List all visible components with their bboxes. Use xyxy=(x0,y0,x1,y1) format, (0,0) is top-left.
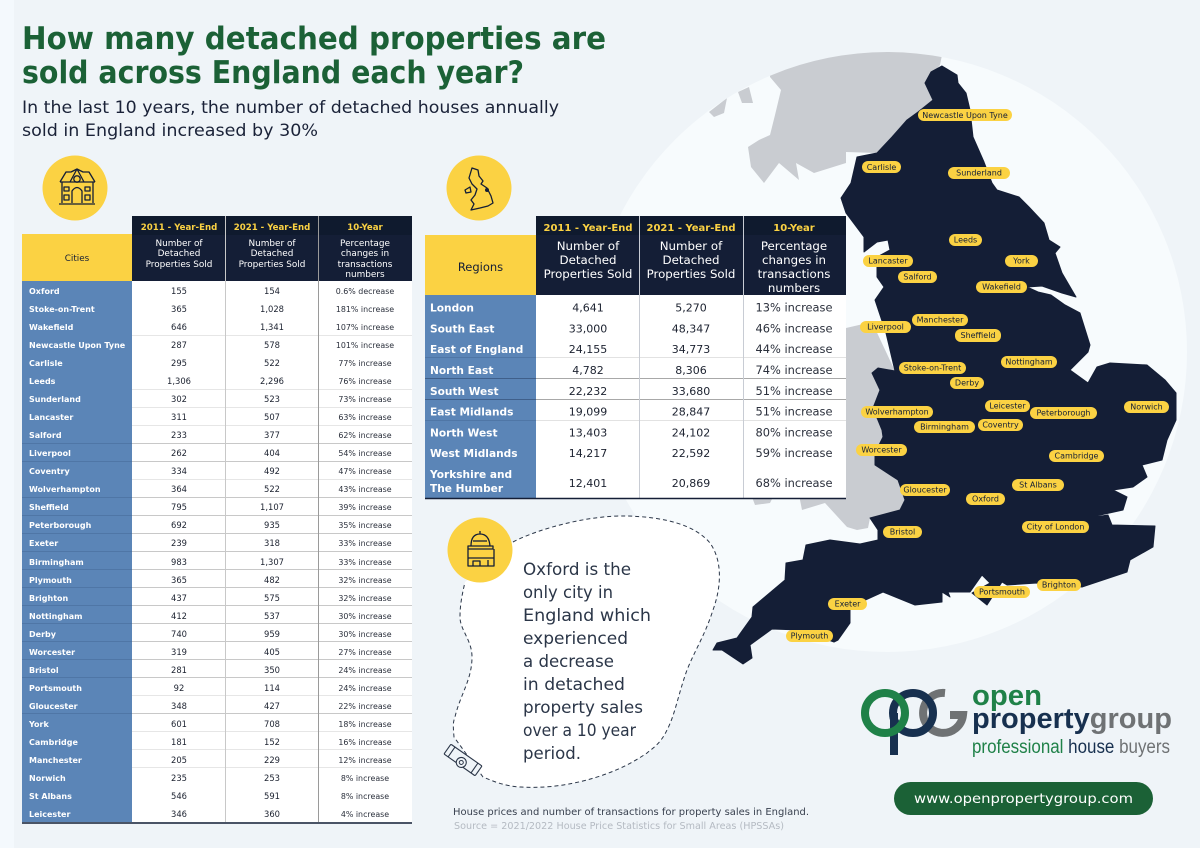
cities table body: 35% increase xyxy=(338,521,392,530)
regions table body: 4,641 xyxy=(572,302,604,314)
cities table header: Properties Sold xyxy=(239,260,305,270)
cities table body: 795 xyxy=(171,502,187,512)
regions table body: West Midlands xyxy=(430,448,518,460)
city labels on map: Norwich xyxy=(1130,402,1163,412)
city labels on map: Liverpool xyxy=(867,322,904,332)
cities table body: 522 xyxy=(264,358,280,368)
city labels on map: Sunderland xyxy=(956,168,1002,178)
cities table body: 253 xyxy=(264,773,280,783)
cities table body: Bristol xyxy=(29,666,59,675)
source note xyxy=(453,807,809,832)
logo mark xyxy=(865,693,963,755)
cities table body: 1,307 xyxy=(260,557,284,567)
table: regions xyxy=(425,216,846,498)
cities table body: 318 xyxy=(264,538,280,548)
cities table body: 1,306 xyxy=(167,376,191,386)
cities table body: Exeter xyxy=(29,539,58,548)
city labels on map: York xyxy=(1012,256,1030,266)
cities table body: 319 xyxy=(171,647,187,657)
cities table body: Wakefield xyxy=(29,323,74,332)
city labels on map xyxy=(786,109,1169,642)
cities table header xyxy=(22,216,412,281)
subtitle: sold in England increased by 30% xyxy=(22,121,318,140)
regions table body: 13,403 xyxy=(569,426,607,440)
regions table body: East of England xyxy=(430,344,523,356)
cities table body: 1,028 xyxy=(260,304,284,314)
cities table body: 708 xyxy=(264,719,280,729)
city labels on map: Exeter xyxy=(835,600,861,608)
cities table body: 54% increase xyxy=(338,449,392,458)
city labels on map: Gloucester xyxy=(903,486,947,494)
cities table body: 32% increase xyxy=(338,594,392,603)
regions table body: 19,099 xyxy=(569,406,607,418)
cities table body: Oxford xyxy=(29,287,60,296)
cities table body: 30% increase xyxy=(338,612,392,621)
cities table body: 33% increase xyxy=(338,539,392,548)
cities table header: Detached xyxy=(158,249,200,259)
city labels on map: Manchester xyxy=(917,316,964,324)
regions table body: 68% increase xyxy=(756,476,832,490)
regions table header: Regions xyxy=(458,260,503,274)
cities table body: 12% increase xyxy=(338,756,392,765)
cities table body: 181 xyxy=(171,737,187,747)
city labels on map: Peterborough xyxy=(1036,408,1091,418)
regions table body: 22,592 xyxy=(672,447,710,460)
cities table body: 365 xyxy=(171,575,187,585)
cities table body: 205 xyxy=(171,755,187,765)
cities table body: 601 xyxy=(171,719,187,729)
regions table body: 74% increase xyxy=(756,363,832,377)
cities table body: 983 xyxy=(171,557,187,567)
cities table body: Nottingham xyxy=(29,612,82,621)
cities table body: 404 xyxy=(264,448,280,458)
cities table body: Wolverhampton xyxy=(29,485,101,494)
cities table body: 22% increase xyxy=(338,702,392,711)
title xyxy=(22,21,606,91)
callout text: a decrease xyxy=(523,652,614,671)
cities table body: 47% increase xyxy=(338,467,392,476)
callout text xyxy=(523,560,651,763)
cities table body: 365 xyxy=(171,304,187,314)
regions table header: Percentage xyxy=(761,239,827,253)
cities table body: 1,107 xyxy=(260,502,284,512)
regions table body: East Midlands xyxy=(430,406,513,418)
regions table body: The Humber xyxy=(430,483,504,495)
city labels on map: Worcester xyxy=(861,446,902,454)
cities table header: Properties Sold xyxy=(146,260,212,270)
cities table body: 18% increase xyxy=(338,720,392,729)
regions table header: 2011 - Year-End xyxy=(544,223,632,234)
cities table body: Brighton xyxy=(29,594,69,603)
cities table body: 334 xyxy=(171,466,187,476)
cities table body: 427 xyxy=(264,701,280,711)
cities table body: 537 xyxy=(264,611,280,621)
regions table body: 51% increase xyxy=(756,404,832,418)
cities table body: 523 xyxy=(264,394,280,404)
website button xyxy=(894,782,1153,815)
city labels on map: Derby xyxy=(955,378,979,388)
cities table body: 33% increase xyxy=(338,558,392,567)
regions table body: South East xyxy=(430,324,494,336)
cities table body: 43% increase xyxy=(338,485,392,494)
regions table body: 34,773 xyxy=(672,343,710,356)
cities table body: 154 xyxy=(264,286,280,296)
city labels on map: Nottingham xyxy=(1005,358,1053,366)
cities table body: Sunderland xyxy=(29,395,81,404)
regions table body: 33,680 xyxy=(672,385,710,398)
title: sold across England each year? xyxy=(22,55,524,91)
logo wordmark xyxy=(972,680,1172,758)
cities table body: 63% increase xyxy=(338,413,392,422)
cities table body: 262 xyxy=(171,448,187,458)
regions table body: 33,000 xyxy=(569,322,607,336)
callout text: property sales xyxy=(523,698,643,717)
city labels on map: Birmingham xyxy=(920,422,969,432)
regions table header: 10-Year xyxy=(773,223,815,234)
regions table body: 28,847 xyxy=(672,406,710,418)
cities table body: 101% increase xyxy=(336,341,394,350)
cities table body: 62% increase xyxy=(338,431,392,440)
subtitle: In the last 10 years, the number of detached houses annually xyxy=(22,98,559,117)
cities table body: 492 xyxy=(264,466,280,476)
regions table body: Yorkshire and xyxy=(429,469,512,481)
regions table header: transactions xyxy=(758,267,830,281)
callout: Oxford xyxy=(453,516,719,787)
cities table body: Liverpool xyxy=(29,449,71,458)
cities table header: Number of xyxy=(248,239,296,249)
cities table body: 229 xyxy=(264,755,280,765)
regions table body xyxy=(425,216,846,498)
cities table body: 181% increase xyxy=(336,305,394,314)
city labels on map: Sheffield xyxy=(960,331,996,340)
cities table body: 1,341 xyxy=(260,322,284,332)
city labels on map: Leicester xyxy=(989,402,1026,410)
cities table body: 152 xyxy=(264,737,280,747)
logo wordmark: professional house buyers xyxy=(972,737,1170,758)
cities table body: Gloucester xyxy=(29,702,78,711)
cities table body: 482 xyxy=(264,575,280,585)
cities table body: 311 xyxy=(171,412,187,422)
cities table body: 405 xyxy=(264,647,280,657)
cities table body: Salford xyxy=(29,431,62,440)
city labels on map: Wolverhampton xyxy=(865,408,929,416)
regions table body: 5,270 xyxy=(675,302,707,314)
city labels on map: St Albans xyxy=(1019,480,1057,490)
regions table body: 24,102 xyxy=(672,426,710,440)
city labels on map: Coventry xyxy=(982,420,1019,430)
globe background xyxy=(587,52,1187,652)
cities table body: 8% increase xyxy=(341,792,389,801)
regions table body: 4,782 xyxy=(572,364,604,377)
callout text: Oxford is the xyxy=(523,560,631,579)
cities table body: 302 xyxy=(171,394,187,404)
city labels on map: Stoke-on-Trent xyxy=(904,364,961,372)
regions table body: South West xyxy=(430,386,499,398)
regions table header: Number of xyxy=(660,239,723,253)
cities table body: 39% increase xyxy=(338,503,392,512)
cities table body: 360 xyxy=(264,809,280,819)
cities table header: Detached xyxy=(251,249,293,259)
cities table body: 114 xyxy=(264,683,280,693)
cities table body: 24% increase xyxy=(338,666,392,675)
cities table body: Leeds xyxy=(29,377,56,386)
icon: city hall xyxy=(448,518,512,582)
map of England xyxy=(713,66,1176,664)
callout text: over a 10 year xyxy=(523,721,636,740)
cities table body: Derby xyxy=(29,630,57,639)
regions table body: 51% increase xyxy=(756,384,832,398)
cities table header: 2021 - Year-End xyxy=(234,223,310,233)
regions table header: Detached xyxy=(663,253,719,267)
cities table body: Newcastle Upon Tyne xyxy=(29,341,126,350)
regions table body: 22,232 xyxy=(569,385,607,398)
cities table body: 27% increase xyxy=(338,648,392,657)
logo wordmark: open xyxy=(972,680,1042,712)
cities table body: 32% increase xyxy=(338,576,392,585)
cities table header: Percentage xyxy=(340,239,390,249)
neighbouring land: Scotland, Wales, islands xyxy=(709,40,945,530)
cities table body: Stoke-on-Trent xyxy=(29,305,95,314)
cities table body: Sheffield xyxy=(29,503,69,512)
regions table body: 13% increase xyxy=(756,300,832,314)
cities table body: 692 xyxy=(171,520,187,530)
cities table header: Cities xyxy=(65,254,90,264)
logo wordmark: propertygroup xyxy=(972,703,1172,735)
city labels on map: Portsmouth xyxy=(979,588,1025,596)
regions table header: changes in xyxy=(762,253,826,267)
source note: Source = 2021/2022 House Price Statistics for Small Areas (HPSSAs) xyxy=(454,821,784,832)
cities table body: 287 xyxy=(171,340,187,350)
cities table body: 740 xyxy=(171,629,187,639)
regions table header: numbers xyxy=(768,281,820,295)
regions table header: Detached xyxy=(560,253,616,267)
cities table body: 77% increase xyxy=(338,359,392,368)
icon: scroll xyxy=(443,744,482,777)
cities table body: 107% increase xyxy=(336,323,394,332)
regions table body: 14,217 xyxy=(569,447,607,460)
cities table body: Plymouth xyxy=(29,576,72,585)
cities table body: Peterborough xyxy=(29,521,92,530)
regions table body: 20,869 xyxy=(672,477,710,490)
callout text: only city in xyxy=(523,583,613,602)
city labels on map: City of London xyxy=(1027,522,1084,532)
callout text: period. xyxy=(523,744,581,763)
cities table body: 233 xyxy=(171,430,187,440)
cities table header: 2011 - Year-End xyxy=(141,223,217,233)
city labels on map: Oxford xyxy=(972,494,999,504)
regions table body: 8,306 xyxy=(675,364,707,377)
cities table body: Coventry xyxy=(29,467,70,476)
city labels on map: Salford xyxy=(903,272,932,282)
cities table body: 0.6% decrease xyxy=(336,287,394,296)
cities table body: 73% increase xyxy=(338,395,392,404)
cities table body: 281 xyxy=(171,665,187,675)
cities table body: 24% increase xyxy=(338,684,392,693)
cities table header: Number of xyxy=(155,239,203,249)
cities table body: 92 xyxy=(174,683,184,693)
callout text: England which xyxy=(523,606,651,625)
cities table body: St Albans xyxy=(29,792,72,801)
city labels on map: Leeds xyxy=(954,236,977,244)
regions table body: 24,155 xyxy=(569,343,607,356)
city labels on map: Newcastle Upon Tyne xyxy=(922,111,1008,120)
cities table body: 2,296 xyxy=(260,376,284,386)
regions table body: 48,347 xyxy=(672,322,710,336)
cities table body: 412 xyxy=(171,611,187,621)
icon: house xyxy=(42,156,108,220)
cities table body: Norwich xyxy=(29,774,66,783)
city labels on map: Plymouth xyxy=(791,632,828,640)
cities table body: 76% increase xyxy=(338,377,392,386)
cities table body: Worcester xyxy=(29,648,75,657)
regions table body: North East xyxy=(430,365,493,377)
subtitle xyxy=(22,98,559,140)
cities table body: 507 xyxy=(264,412,280,422)
cities table body: 646 xyxy=(171,322,187,332)
city labels on map: Brighton xyxy=(1042,580,1076,590)
cities table body: 235 xyxy=(171,773,187,783)
city labels on map: Wakefield xyxy=(982,282,1021,292)
city labels on map: Lancaster xyxy=(868,256,908,266)
regions table body: 59% increase xyxy=(756,446,832,460)
regions table header: Properties Sold xyxy=(544,267,632,281)
cities table body: 575 xyxy=(264,593,280,603)
city labels on map: Cambridge xyxy=(1055,452,1099,460)
source note: House prices and number of transactions for property sales in England. xyxy=(453,807,809,818)
cities table body: 16% increase xyxy=(338,738,392,747)
cities table body: 346 xyxy=(171,809,187,819)
cities table body: Birmingham xyxy=(29,558,84,567)
title: How many detached properties are xyxy=(22,21,606,57)
cities table body: Lancaster xyxy=(29,413,73,422)
website button: www.openpropertygroup.com xyxy=(914,791,1133,807)
cities table body: 377 xyxy=(264,430,280,440)
cities table body: Cambridge xyxy=(29,738,78,747)
cities table body: 364 xyxy=(171,484,187,494)
regions table body: London xyxy=(430,302,474,314)
cities table body: 30% increase xyxy=(338,630,392,639)
cities table body: 522 xyxy=(264,484,280,494)
logo: Open Property Group xyxy=(865,680,1172,758)
cities table body: Portsmouth xyxy=(29,684,82,693)
regions table header: Number of xyxy=(557,239,620,253)
cities table header: changes in xyxy=(341,249,389,259)
regions table body: North West xyxy=(430,428,498,440)
cities table body xyxy=(22,216,412,823)
cities table body: York xyxy=(28,720,50,729)
cities table body: 155 xyxy=(171,286,187,296)
city labels on map: Carlisle xyxy=(867,163,896,172)
regions table body: 80% increase xyxy=(756,426,832,440)
table: cities xyxy=(22,216,412,823)
regions table body: 12,401 xyxy=(569,477,607,490)
regions table header: Properties Sold xyxy=(647,267,735,281)
callout text: in detached xyxy=(523,675,625,694)
cities table body: 350 xyxy=(264,665,280,675)
cities table body: Leicester xyxy=(29,810,70,819)
regions table header xyxy=(425,216,846,295)
callout text: experienced xyxy=(523,629,628,648)
regions table body: 46% increase xyxy=(756,322,832,336)
cities table body: 295 xyxy=(171,358,187,368)
cities table body: 8% increase xyxy=(341,774,389,783)
regions table body: 44% increase xyxy=(756,342,832,356)
cities table body: 4% increase xyxy=(341,810,389,819)
cities table body: Carlisle xyxy=(29,359,63,368)
icon: UK map xyxy=(446,156,512,220)
cities table body: 546 xyxy=(171,791,187,801)
cities table body: 239 xyxy=(171,538,187,548)
cities table body: 578 xyxy=(264,340,280,350)
cities table body: 437 xyxy=(171,593,187,603)
regions table header: 2021 - Year-End xyxy=(646,223,736,234)
cities table body: 935 xyxy=(264,520,280,530)
cities table body: Manchester xyxy=(29,756,82,765)
cities table body: 591 xyxy=(264,791,280,801)
cities table body: 348 xyxy=(171,701,187,711)
cities table body: 959 xyxy=(264,629,280,639)
cities table header: 10-Year xyxy=(347,223,384,233)
cities table header: transactions xyxy=(338,260,393,270)
cities table header: numbers xyxy=(345,270,385,280)
city labels on map: Bristol xyxy=(890,528,915,536)
